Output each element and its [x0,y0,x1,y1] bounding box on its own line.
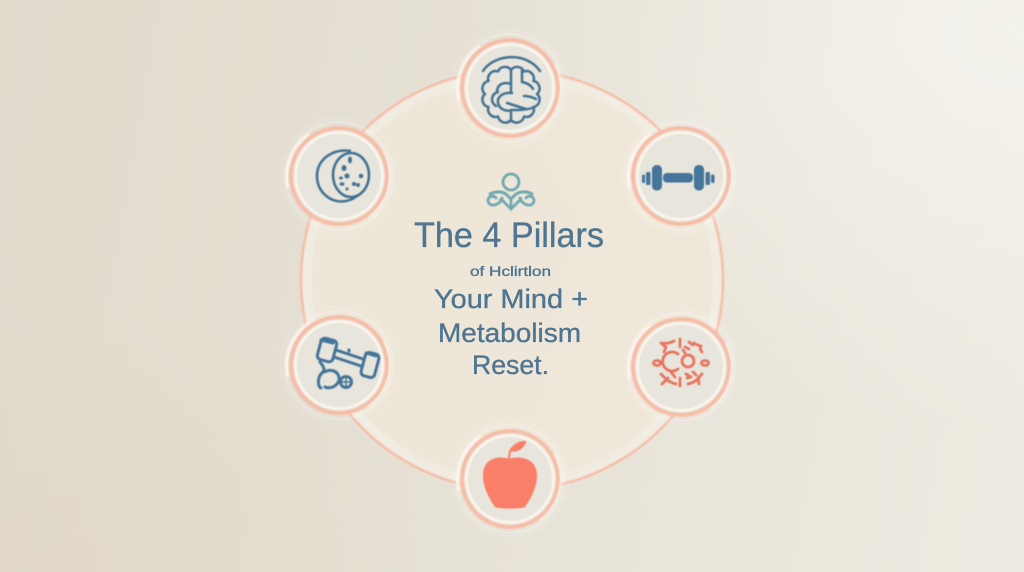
headline line 2: Metabolism [438,318,581,348]
title: The 4 Pillars [414,216,604,255]
main ring [301,70,723,490]
icon: apple [483,441,537,508]
centre text block [414,174,604,380]
node: brain [450,28,570,148]
node: apple [450,419,570,539]
node: microbes [621,307,741,427]
icon: dumbbell [642,165,714,190]
icon: dumbbell and stethoscope [316,337,380,388]
subtitle: of Hclirtlon [470,264,551,279]
headline line 1: Your Mind + [434,284,588,314]
node: dumbbell and stethoscope [279,305,399,425]
icon: brain [482,57,540,123]
icon: moon [317,151,369,201]
icon: centre emblem [488,174,534,209]
node: dumbbell [621,116,741,236]
headline line 3: Reset. [472,350,549,380]
node: moon [279,116,399,236]
icon: microbes [654,339,708,386]
